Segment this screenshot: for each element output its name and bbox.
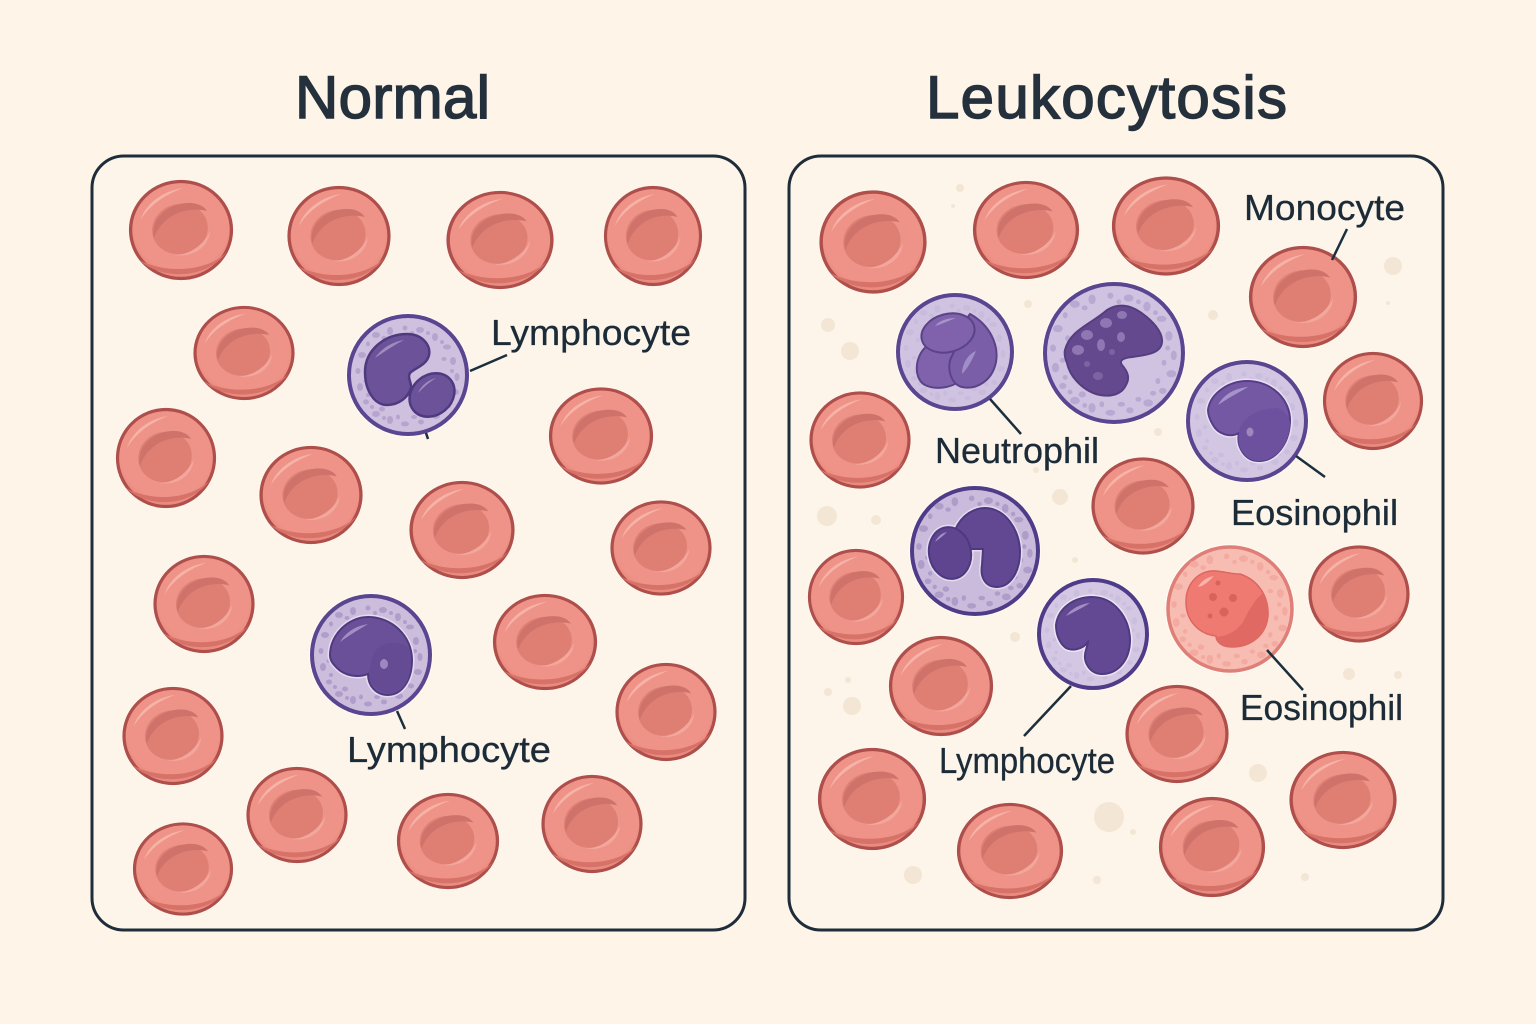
label: neutrophil: Neutrophil [935,430,1099,471]
white cell: neutrophil [895,292,1015,412]
label: monocyte: Monocyte [1244,187,1405,228]
title: Normal: Normal [295,64,490,131]
label: lymphocyte lower [347,711,551,770]
white cell: lymphocyte right [1036,577,1150,691]
label: monocyte [1244,187,1405,260]
label: lymphocyte right [939,686,1115,781]
label: lymphocyte right: Lymphocyte [939,740,1115,781]
label: neutrophil [935,399,1099,471]
white cell: lymphocyte upper [346,313,470,439]
white cell: mid-left cell [909,485,1041,617]
white cell: large cell with mottled nucleus [1042,281,1186,425]
label: eosinophil upper: Eosinophil [1231,492,1398,533]
label: lymphocyte lower: Lymphocyte [347,729,551,770]
label: eosinophil lower: Eosinophil [1240,687,1403,728]
label: lymphocyte upper [470,312,691,371]
white cell: eosinophil upper [1185,359,1309,483]
white cell: red eosinophil [1165,544,1295,674]
red blood cells, leukocytosis panel [808,176,1424,899]
panel: leukocytosis blood [789,156,1443,930]
white cell: lymphocyte lower [309,593,433,717]
red blood cells, normal panel [116,180,717,916]
panel: normal blood [92,156,745,930]
label: eosinophil upper [1231,456,1398,533]
title: Leukocytosis: Leukocytosis [926,64,1287,131]
background debris particles [817,184,1402,884]
label: eosinophil lower [1240,650,1403,728]
label: lymphocyte upper: Lymphocyte [491,312,691,353]
